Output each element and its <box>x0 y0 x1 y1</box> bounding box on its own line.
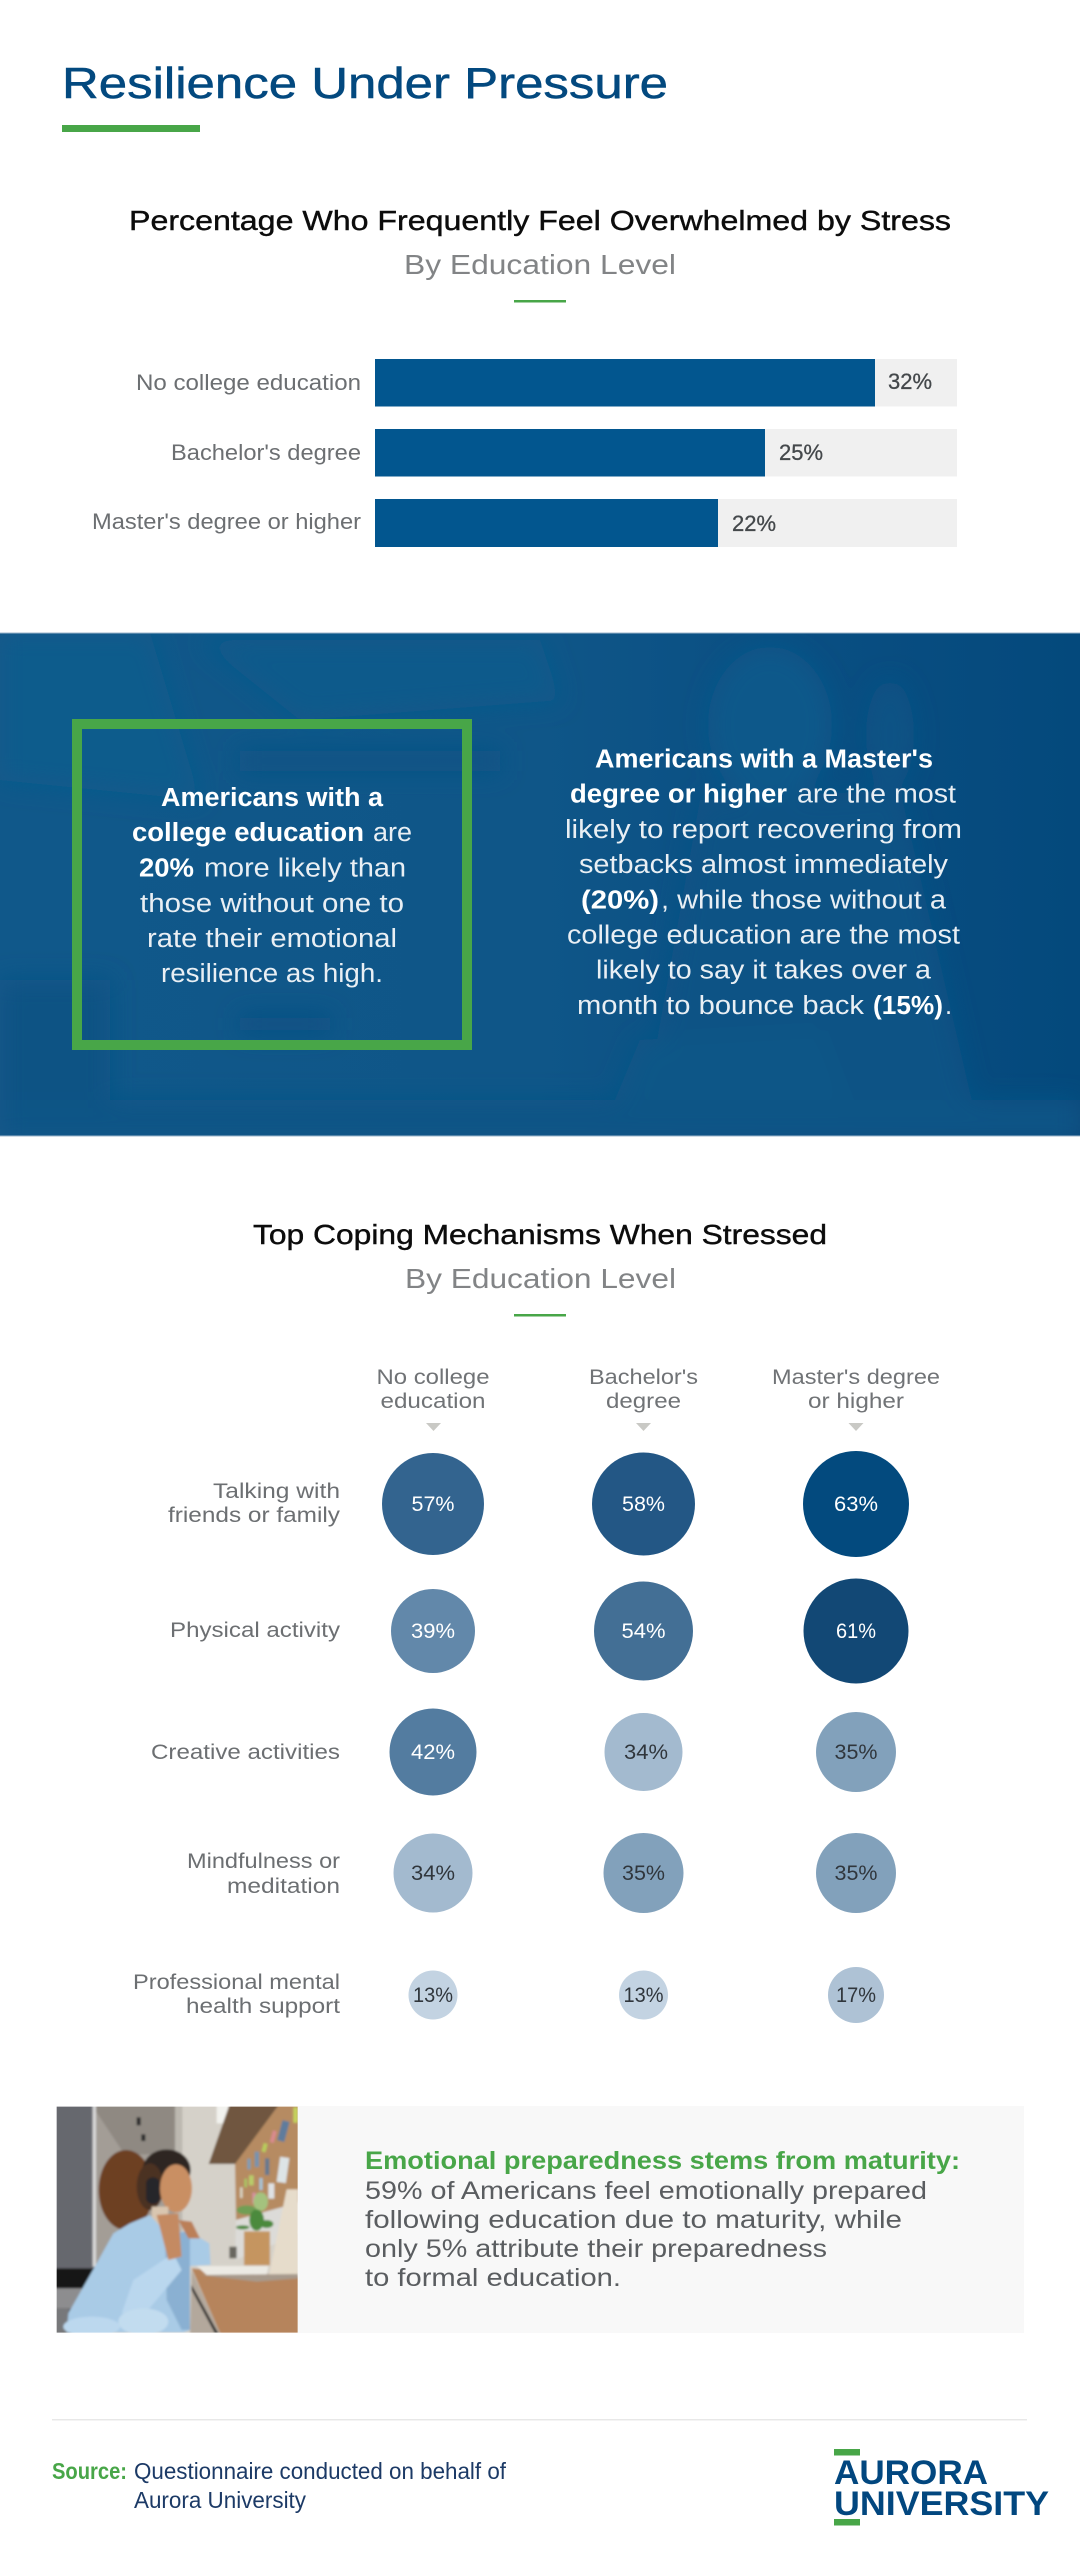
row: creative activities <box>151 1708 896 1796</box>
callout: green box: are <box>373 819 412 847</box>
panel: emotional preparedness callout <box>53 2103 1024 2337</box>
row: mindfulness or meditation: 35% <box>622 1861 665 1885</box>
logo: Aurora University <box>834 2449 1049 2526</box>
text block: master's degree finding: (20%) <box>581 886 659 914</box>
bubble chart: coping mechanisms <box>133 1365 940 2023</box>
column header: bachelor's degree <box>589 1365 698 1431</box>
row: talking with friends or family: friends or family <box>168 1503 340 1527</box>
row: talking with friends or family: Talking with <box>213 1479 340 1503</box>
row: professional mental health support: health support <box>186 1994 340 2018</box>
text block: master's degree finding: (15%) <box>873 992 943 1020</box>
row: professional mental health support <box>133 1967 884 2023</box>
text block: preparedness finding: following education due to maturity, while <box>365 2206 902 2234</box>
column header: no college education: education <box>380 1389 486 1413</box>
row: professional mental health support: 13% <box>413 1983 453 2007</box>
column header: bachelor's degree: degree <box>606 1389 681 1413</box>
bar: bachelor's degree 25% <box>171 429 957 476</box>
bar: no college education 32%: No college education <box>136 370 361 395</box>
column header: master's degree or higher: Master's degree <box>772 1365 940 1389</box>
row: professional mental health support: Professional mental <box>133 1970 340 1994</box>
text block: preparedness finding: 59% of Americans feel emotionally prepared <box>365 2177 927 2205</box>
row: professional mental health support: 13% <box>624 1983 664 2007</box>
bar: master's degree or higher 22% <box>92 499 957 547</box>
bar: master's degree or higher 22%: 22% <box>732 511 776 536</box>
bar: no college education 32% <box>136 359 957 406</box>
text block: master's degree finding: month to bounce back <box>577 992 864 1020</box>
row: physical activity <box>170 1578 908 1684</box>
row: professional mental health support: 17% <box>836 1983 876 2007</box>
row: physical activity: 39% <box>411 1619 455 1643</box>
callout: green box: Americans with a <box>161 784 384 812</box>
heading: coping mechanisms <box>253 1219 827 1316</box>
row: creative activities: Creative activities <box>151 1740 340 1764</box>
bar: master's degree or higher 22%: Master's degree or higher <box>92 509 361 534</box>
row: talking with friends or family: 63% <box>834 1492 878 1516</box>
callout: green box: rate their emotional <box>147 925 397 953</box>
source note <box>52 2458 507 2513</box>
text block: master's degree finding: Americans with a Master's <box>595 746 933 774</box>
logo: Aurora University: UNIVERSITY <box>834 2485 1049 2523</box>
row: physical activity: Physical activity <box>170 1618 340 1642</box>
row: talking with friends or family: 57% <box>412 1492 454 1516</box>
callout: green box: resilience as high. <box>161 960 383 988</box>
row: mindfulness or meditation: Mindfulness or <box>187 1849 340 1873</box>
heading: stress chart: Percentage Who Frequently Feel Overwhelmed by Stress <box>129 205 951 236</box>
callout: green box <box>77 724 467 1045</box>
row: physical activity: 54% <box>622 1619 666 1643</box>
callout: green box: college education <box>132 819 364 847</box>
heading: coping mechanisms: By Education Level <box>405 1263 676 1294</box>
bar: bachelor's degree 25%: Bachelor's degree <box>171 440 361 465</box>
text block: preparedness finding: only 5% attribute their preparedness <box>365 2235 827 2263</box>
row: creative activities: 35% <box>834 1740 878 1764</box>
text block: preparedness finding: Emotional preparedness stems from maturity: <box>365 2147 960 2175</box>
text block: master's degree finding: likely to report recovering from <box>565 816 962 844</box>
row: mindfulness or meditation: 35% <box>834 1861 878 1885</box>
row: talking with friends or family: 58% <box>622 1492 665 1516</box>
row: physical activity: 61% <box>836 1619 876 1643</box>
row: mindfulness or meditation: meditation <box>227 1874 340 1898</box>
bar: no college education 32%: 32% <box>888 369 932 394</box>
text block: preparedness finding <box>365 2147 960 2292</box>
callout: green box: more likely than <box>204 854 406 882</box>
column header: master's degree or higher <box>772 1365 940 1431</box>
text block: master's degree finding <box>565 746 962 1020</box>
callout: green box: those without one to <box>140 890 404 918</box>
text block: master's degree finding: are the most <box>797 781 956 809</box>
source note: Aurora University <box>134 2487 306 2513</box>
text block: master's degree finding: . <box>945 992 952 1020</box>
logo: Aurora University: AURORA <box>834 2454 988 2492</box>
text block: preparedness finding: to formal education. <box>365 2264 621 2292</box>
source note: Questionnaire conducted on behalf of <box>134 2458 507 2484</box>
row: talking with friends or family <box>168 1451 909 1557</box>
row: mindfulness or meditation: 34% <box>411 1861 455 1885</box>
panel: blue resilience band <box>0 632 1080 1140</box>
callout: green box: 20% <box>139 854 194 882</box>
text block: master's degree finding: , while those without a <box>661 886 947 914</box>
heading: coping mechanisms: Top Coping Mechanisms When Stressed <box>253 1219 827 1250</box>
text block: master's degree finding: setbacks almost immediately <box>579 851 948 879</box>
column header: no college education <box>376 1365 490 1431</box>
row: creative activities: 42% <box>411 1740 455 1764</box>
title: Resilience Under Pressure <box>62 59 668 108</box>
title <box>62 59 668 132</box>
text block: master's degree finding: likely to say it takes over a <box>596 957 932 985</box>
bar: bachelor's degree 25%: 25% <box>779 440 823 465</box>
row: creative activities: 34% <box>624 1740 668 1764</box>
column header: bachelor's degree: Bachelor's <box>589 1365 698 1389</box>
column header: master's degree or higher: or higher <box>808 1389 904 1413</box>
text block: master's degree finding: college education are the most <box>567 922 960 950</box>
text block: master's degree finding: degree or higher <box>570 781 787 809</box>
column header: no college education: No college <box>376 1365 490 1389</box>
bar chart: overwhelmed by stress <box>92 359 957 547</box>
image: woman at laptop <box>53 2103 302 2337</box>
heading: stress chart <box>129 205 951 302</box>
source note: Source: <box>52 2458 127 2484</box>
row: mindfulness or meditation <box>187 1833 896 1913</box>
heading: stress chart: By Education Level <box>404 249 676 280</box>
